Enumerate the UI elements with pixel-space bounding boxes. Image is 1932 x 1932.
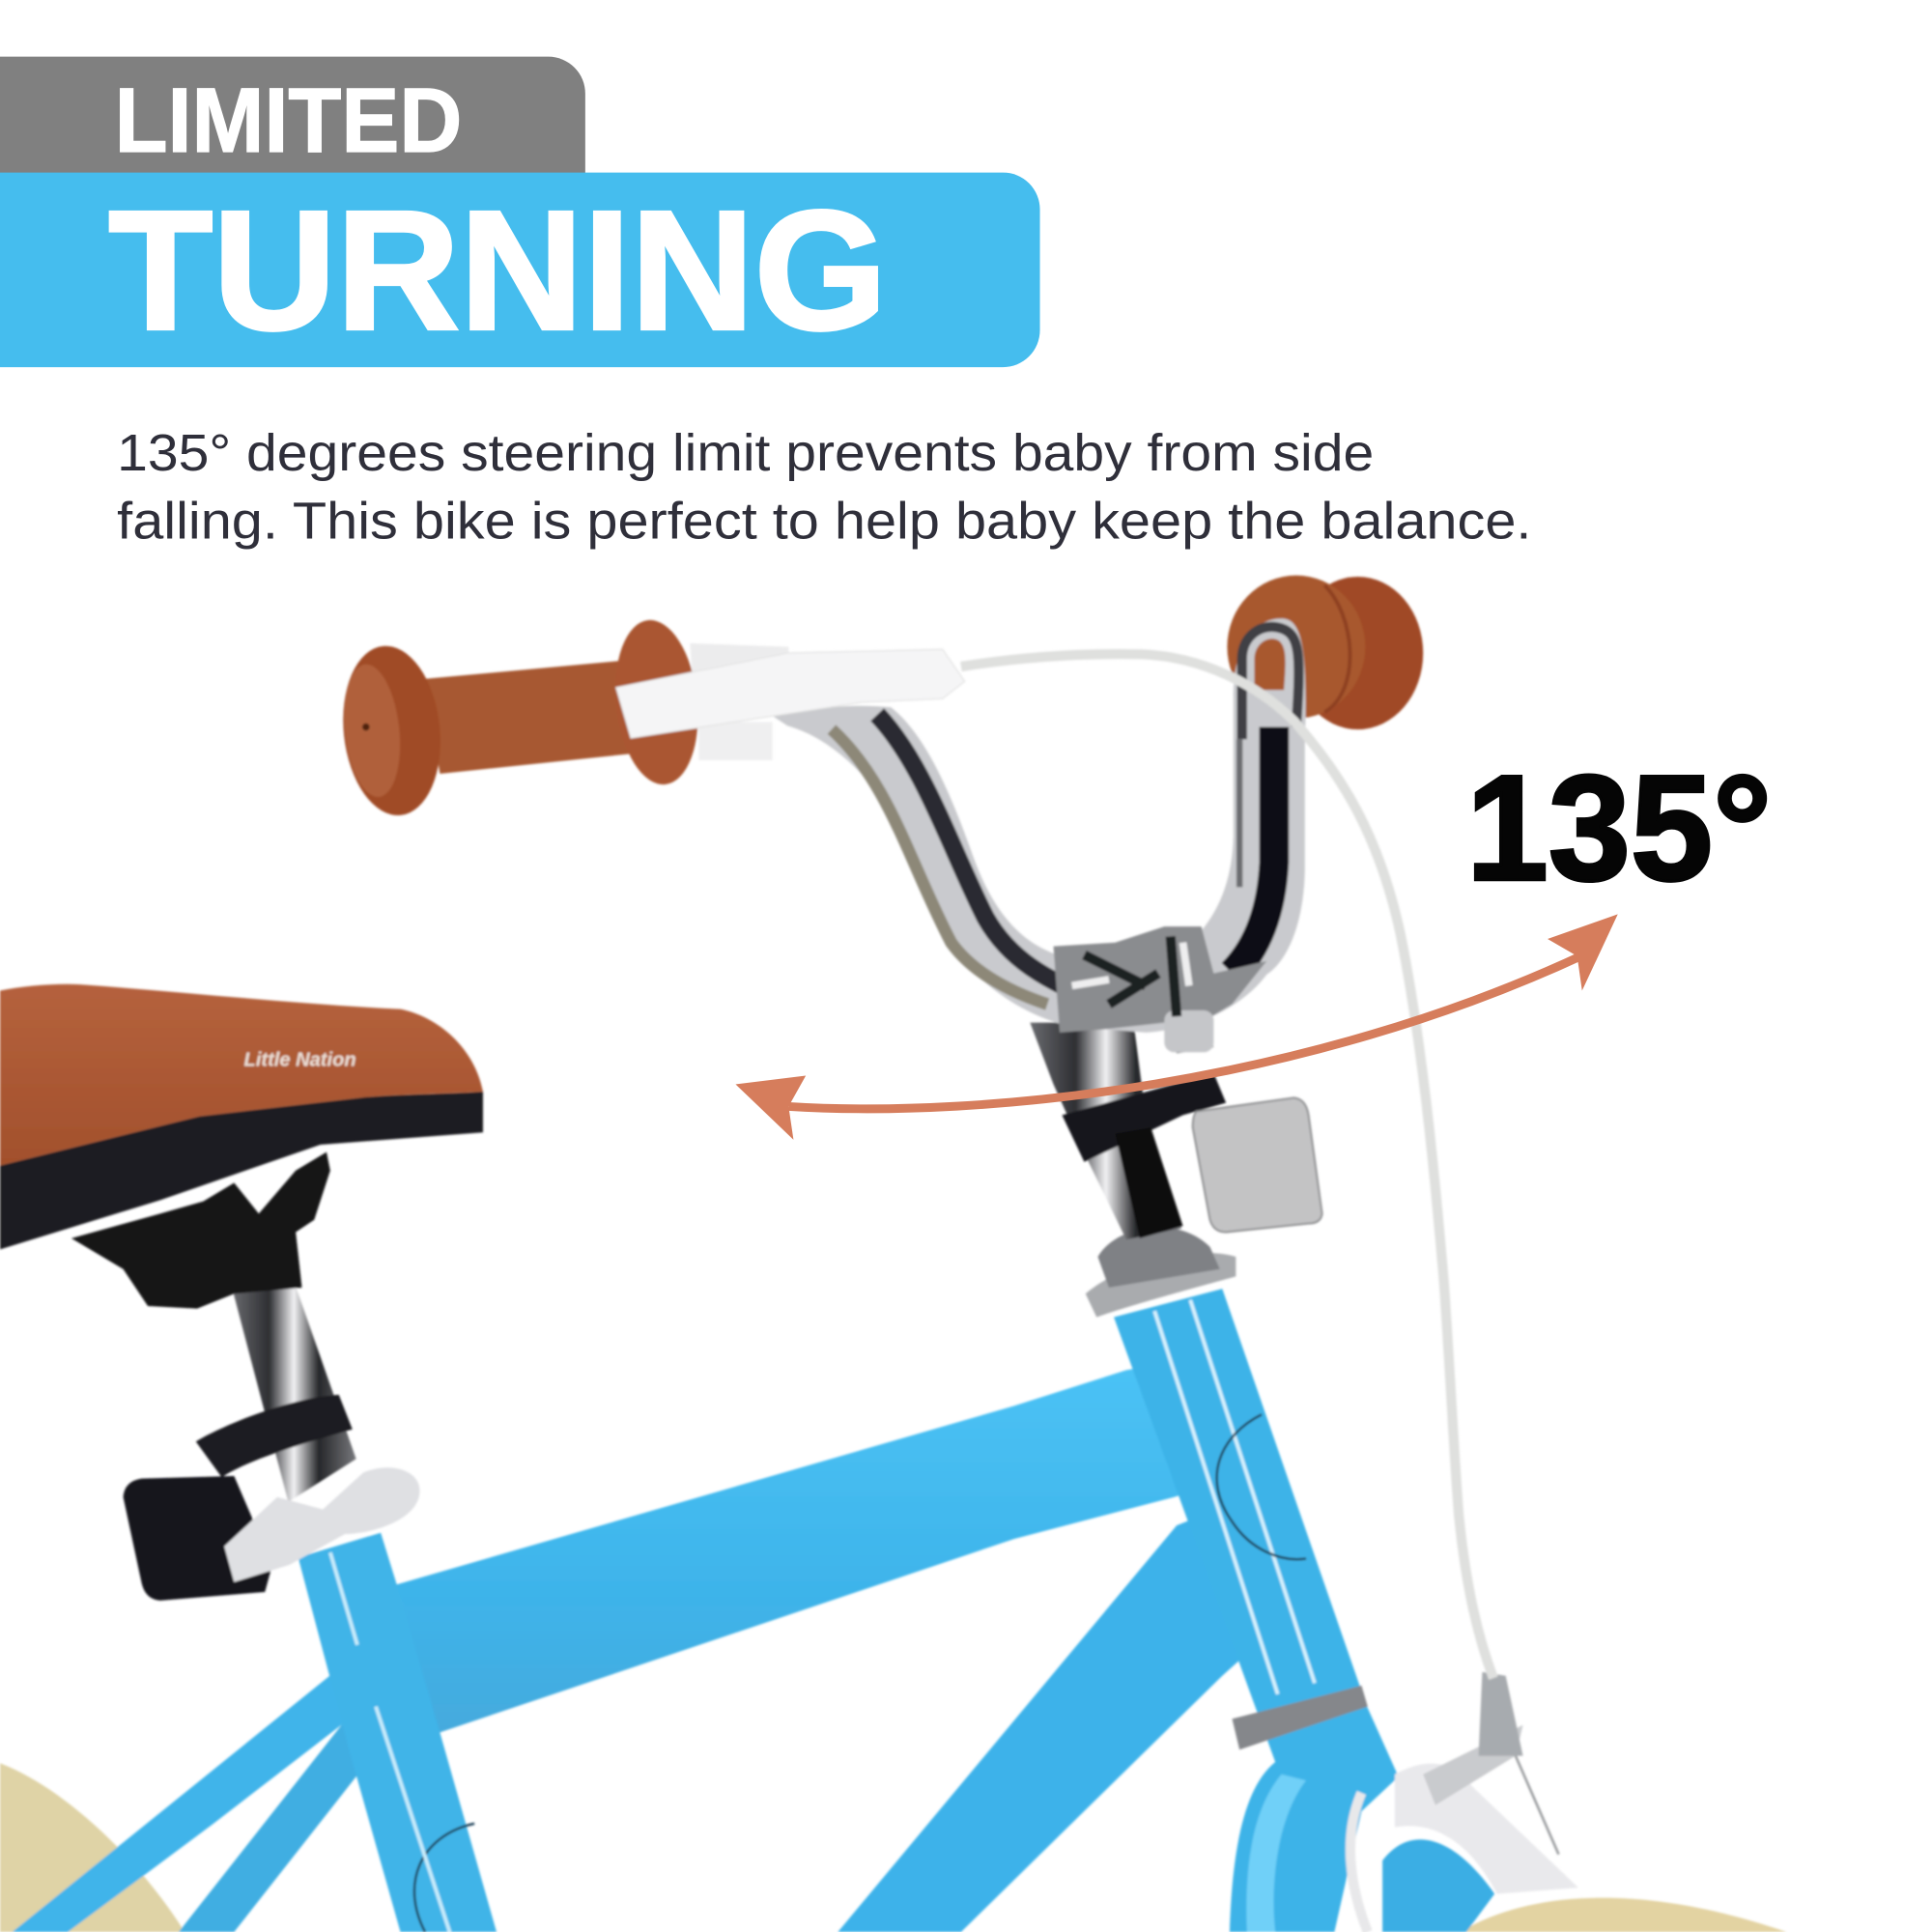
banner: TURNING: TURNING [108, 177, 887, 366]
front brake caliper [1350, 1672, 1578, 1932]
head tube logo [1217, 1414, 1306, 1559]
bicycle illustration [0, 576, 1786, 1932]
rear light [124, 1476, 272, 1601]
inner loop opening [1254, 639, 1286, 690]
saddle [0, 984, 483, 1249]
bike frame [13, 1289, 1494, 1932]
seat tube highlight [330, 1552, 450, 1932]
seat tube logo [414, 1824, 474, 1932]
description text: falling. This bike is perfect to help baby keep the balance. [117, 493, 1531, 550]
right grip [1227, 576, 1423, 729]
reflector [1193, 1097, 1322, 1233]
stem clamp [1054, 926, 1266, 1054]
seat clamp [224, 1467, 419, 1582]
headset collars [1086, 1227, 1368, 1749]
description text [117, 425, 1531, 550]
angle label: 135° [1466, 744, 1772, 912]
rear tyre [0, 1763, 185, 1932]
handlebar [773, 618, 1306, 1054]
stem [1030, 1023, 1226, 1239]
steering arc arrow [735, 914, 1618, 1140]
left grip [335, 616, 706, 820]
description text: 135° degrees steering limit prevents baby from side [117, 425, 1374, 482]
banner: LIMITED: LIMITED [115, 71, 462, 172]
saddle clamp and seat post [71, 1152, 356, 1502]
head tube highlights [1154, 1300, 1315, 1694]
front tyre [1460, 1898, 1786, 1932]
banner: LIMITED [0, 57, 585, 179]
brake lever [616, 643, 965, 760]
saddle: Little Nation [244, 1049, 356, 1070]
brake cable [961, 654, 1493, 1678]
